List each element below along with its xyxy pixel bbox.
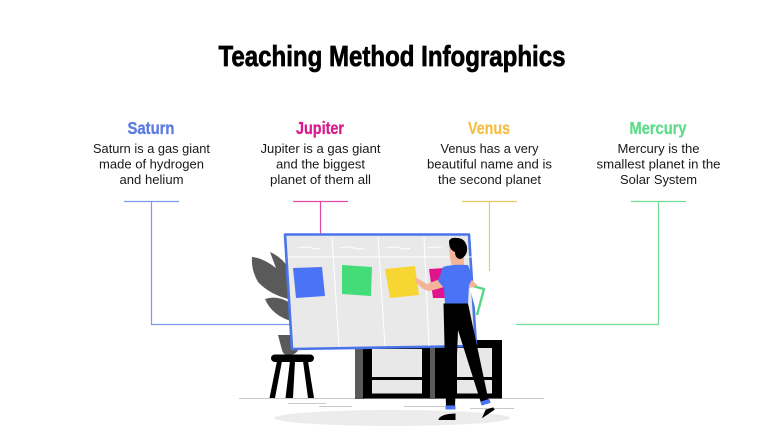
- heading: Saturn: Saturn: [128, 118, 174, 138]
- connector: Mercury: [516, 202, 686, 324]
- sticky note: pink: [429, 268, 445, 298]
- text block: Saturn: Saturn is a gas giant: [93, 141, 210, 156]
- shirt: [438, 265, 473, 304]
- sticky note: blue: [293, 267, 325, 298]
- text block: Mercury: Mercury is the: [618, 141, 700, 156]
- panel: Venus: [427, 118, 552, 187]
- title: Teaching Method Infographics: [218, 41, 566, 73]
- shoes: [439, 408, 494, 420]
- text block: Mercury: smallest planet in the: [596, 156, 720, 172]
- floor shadow: [274, 410, 510, 426]
- illustration: person: [415, 238, 494, 420]
- panel: Mercury: [596, 118, 720, 187]
- floor line: [239, 398, 544, 408]
- hair: [449, 238, 467, 259]
- text block: Venus: Venus has a very: [440, 141, 539, 156]
- heading: Jupiter: Jupiter: [296, 118, 344, 138]
- text block: Venus: beautiful name and is: [427, 156, 552, 172]
- arm: [415, 277, 444, 291]
- text block: Saturn: made of hydrogen: [99, 156, 204, 172]
- sticky note: green: [342, 265, 372, 296]
- text block: Saturn: and helium: [120, 172, 184, 187]
- trousers: [444, 304, 488, 406]
- connector: Saturn: [124, 202, 292, 324]
- text block: Jupiter: Jupiter is a gas giant: [260, 141, 381, 156]
- panel: Jupiter: [260, 118, 381, 187]
- clipboard: [469, 285, 484, 315]
- illustration: floor and furniture: [239, 252, 544, 426]
- connector: Jupiter: [293, 202, 348, 268]
- heading: Venus: Venus: [468, 118, 510, 138]
- icon: plant: [252, 252, 302, 355]
- neck and face: [449, 246, 464, 266]
- cuffs: [446, 400, 490, 409]
- sticky note: yellow: [385, 266, 419, 298]
- board grid lines: [288, 237, 472, 346]
- board panel: [285, 234, 476, 349]
- panel: Saturn: [93, 118, 210, 187]
- heading: Mercury: Mercury: [630, 118, 687, 138]
- icon: stool: [270, 354, 314, 398]
- text block: Jupiter: planet of them all: [270, 172, 371, 187]
- illustration: board: [285, 234, 476, 349]
- text block: Venus: the second planet: [438, 172, 541, 187]
- icon: cabinet: [355, 340, 502, 399]
- connector: Venus: [462, 202, 517, 271]
- text block: Mercury: Solar System: [620, 172, 697, 187]
- text block: Jupiter: and the biggest: [276, 156, 365, 172]
